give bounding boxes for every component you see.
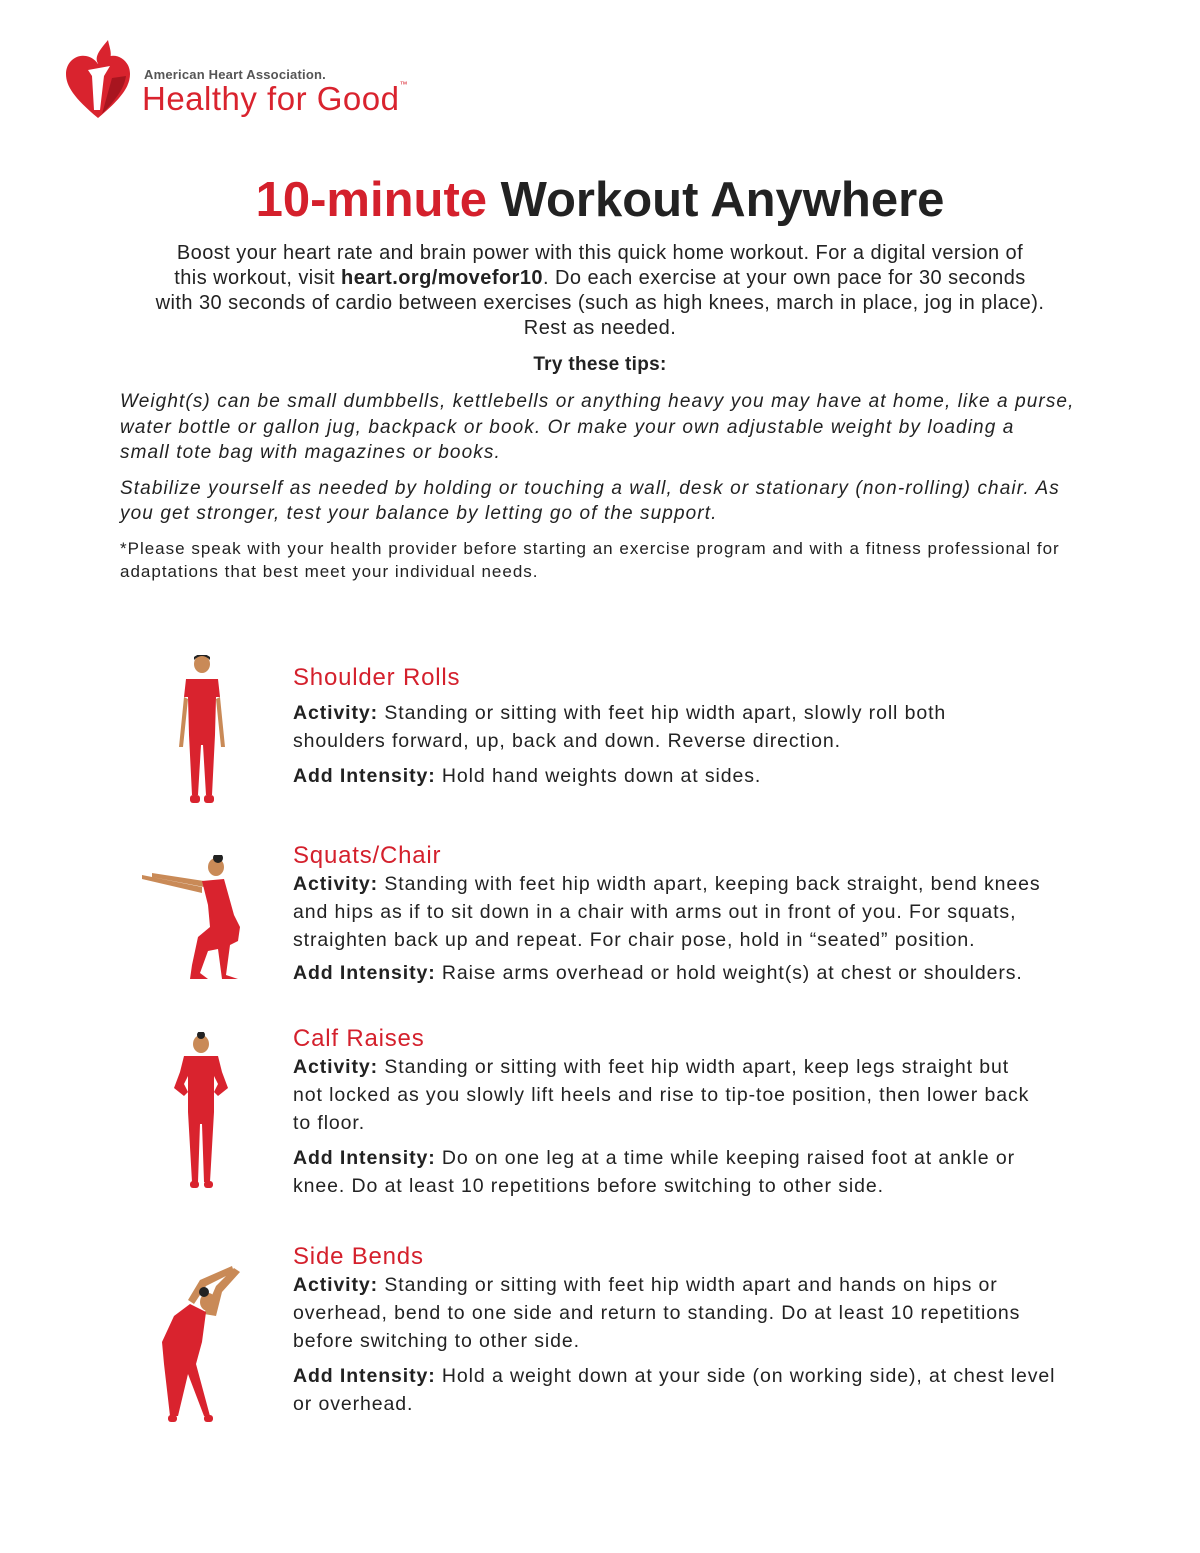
disclaimer bbox=[120, 539, 1060, 581]
text: you get stronger, test your balance by letting go of the support. bbox=[120, 503, 718, 524]
section: calf raises: Add Intensity: Do on one leg at a time while keeping raised foot at ankle or bbox=[293, 1147, 1015, 1169]
section: shoulder rolls: Activity: Standing or sitting with feet hip width apart, slowly roll both bbox=[293, 702, 946, 724]
logo text: American Heart Association. bbox=[144, 67, 326, 82]
intro text bbox=[156, 242, 1044, 339]
section: calf raises: Calf Raises bbox=[293, 1025, 425, 1052]
tips: Weight(s) can be small dumbbells, kettlebells or anything heavy you may have at home, like a purse, bbox=[120, 391, 1074, 412]
section: calf raises: Activity: Standing or sitting with feet hip width apart, keep legs straight but bbox=[293, 1056, 1009, 1078]
icon: heart torch bbox=[66, 40, 130, 118]
section: calf raises bbox=[293, 1025, 1029, 1197]
section: side bends: Activity: Standing or sitting with feet hip width apart and hands on hips or bbox=[293, 1274, 998, 1296]
section: calf raises: to floor. bbox=[293, 1112, 365, 1134]
section: squats bbox=[293, 842, 1041, 984]
section: calf raises: not locked as you slowly lift heels and rise to tip-toe position, then lower back bbox=[293, 1084, 1029, 1106]
section: side bends: or overhead. bbox=[293, 1393, 413, 1415]
figure: side bends bbox=[162, 1266, 240, 1422]
figure: calf raises bbox=[174, 1032, 228, 1188]
section: squats: Add Intensity: Raise arms overhead or hold weight(s) at chest or shoulders. bbox=[293, 962, 1023, 984]
section: side bends: overhead, bend to one side and return to standing. Do at least 10 repetitions bbox=[293, 1302, 1020, 1324]
logo: Healthy for Good™ bbox=[142, 80, 408, 117]
section: squats: straighten back up and repeat. For chair pose, hold in “seated” position. bbox=[293, 929, 975, 951]
figure: squats bbox=[142, 855, 240, 979]
tips bbox=[120, 391, 1074, 463]
section: side bends: before switching to other side. bbox=[293, 1330, 580, 1352]
section: squats: Activity: Standing with feet hip width apart, keeping back straight, bend knees bbox=[293, 873, 1041, 895]
logo bbox=[66, 40, 408, 118]
section: shoulder rolls bbox=[293, 664, 946, 787]
intro text: Boost your heart rate and brain power with this quick home workout. For a digital version of bbox=[177, 242, 1023, 264]
section: side bends bbox=[293, 1243, 1055, 1415]
intro text: with 30 seconds of cardio between exercises (such as high knees, march in place, jog in place). bbox=[156, 292, 1044, 314]
figure: shoulder rolls bbox=[179, 655, 225, 803]
disclaimer: *Please speak with your health provider before starting an exercise program and with a fitness professional for bbox=[120, 539, 1060, 558]
intro text: this workout, visit heart.org/movefor10. Do each exercise at your own pace for 30 seconds bbox=[174, 267, 1026, 289]
section: side bends: Add Intensity: Hold a weight down at your side (on working side), at chest level bbox=[293, 1365, 1055, 1387]
tips: small tote bag with magazines or books. bbox=[120, 442, 501, 463]
tips: water bottle or gallon jug, backpack or book. Or make your own adjustable weight by loading a bbox=[120, 416, 1014, 438]
disclaimer: adaptations that best meet your individual needs. bbox=[120, 562, 539, 581]
section: shoulder rolls: Shoulder Rolls bbox=[293, 664, 460, 691]
section: shoulder rolls: shoulders forward, up, back and down. Reverse direction. bbox=[293, 730, 841, 752]
tips heading: Try these tips: bbox=[533, 354, 667, 375]
section: shoulder rolls: Add Intensity: Hold hand weights down at sides. bbox=[293, 765, 761, 787]
section: squats: and hips as if to sit down in a chair with arms out in front of you. For squats, bbox=[293, 901, 1016, 923]
title: 10-minute Workout Anywhere bbox=[256, 173, 944, 227]
section: side bends: Side Bends bbox=[293, 1243, 424, 1270]
section: squats: Squats/Chair bbox=[293, 842, 441, 869]
text: Stabilize yourself as needed by holding or touching a wall, desk or stationary (non-rolling) chair. As bbox=[120, 478, 1060, 499]
intro text: Rest as needed. bbox=[524, 317, 676, 339]
section: calf raises: knee. Do at least 10 repetitions before switching to other side. bbox=[293, 1175, 884, 1197]
